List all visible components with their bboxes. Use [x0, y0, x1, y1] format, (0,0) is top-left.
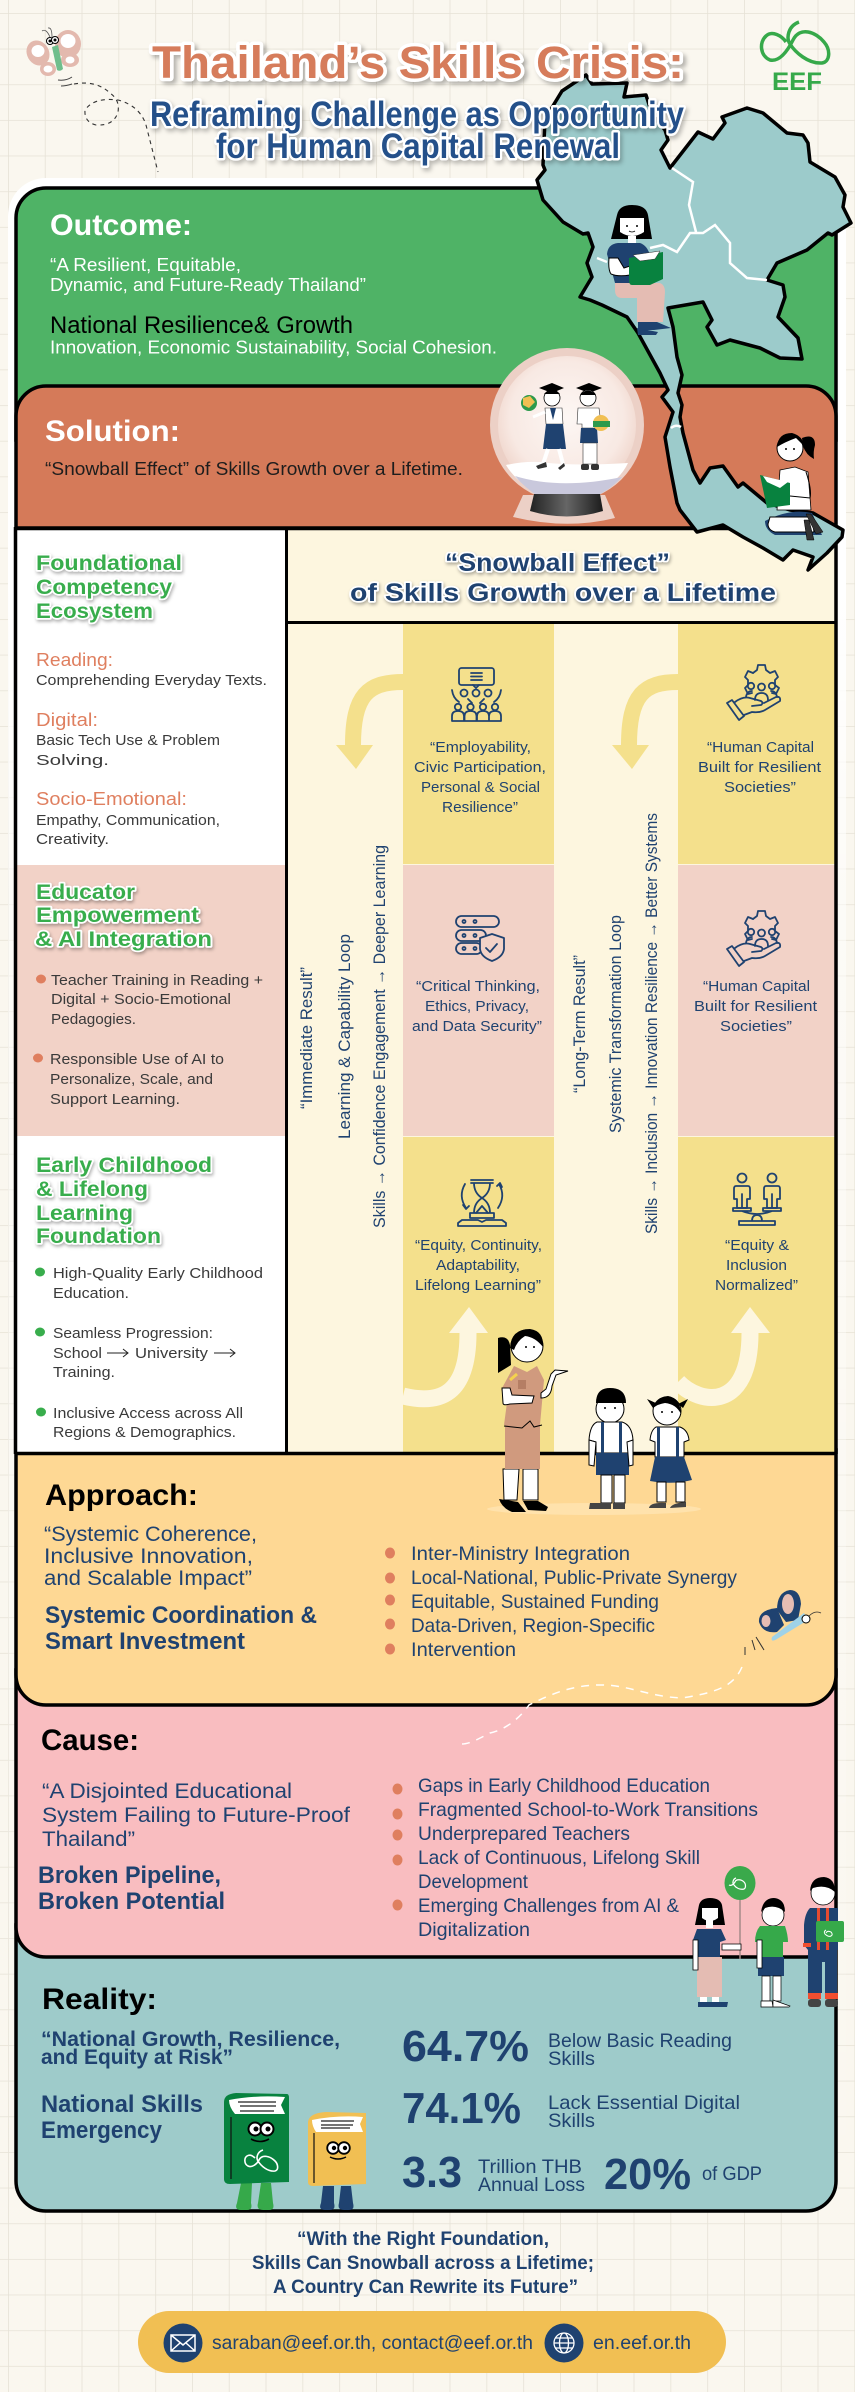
outcome quote — [50, 254, 366, 295]
text: employability — [414, 739, 546, 816]
reality statement: National Skills — [41, 2091, 203, 2118]
stat: gdp — [604, 2150, 762, 2199]
cause bullet list: Gaps in Early Childhood Education — [418, 1775, 710, 1797]
email addresses: saraban@eef.or.th, contact@eef.or.th — [212, 2332, 533, 2354]
text: human capital middle — [694, 978, 818, 1035]
stat: reading — [402, 2022, 732, 2071]
stat: digital: Skills — [548, 2110, 595, 2132]
educator bullets: Teacher Training in Reading + — [51, 972, 263, 989]
educator empowerment heading: Educator — [36, 881, 135, 904]
stat: annual loss: 3.3 — [402, 2148, 462, 2197]
reading text: Comprehending Everyday Texts. — [36, 672, 267, 689]
cause quote: System Failing to Future-Proof — [42, 1803, 350, 1827]
approach bullet list: Intervention — [411, 1639, 516, 1661]
vertical label: long-term result: “Long-Term Result” — [570, 955, 589, 1093]
text: human capital middle: Societies” — [720, 1018, 792, 1035]
early childhood bullets: Education. — [53, 1285, 129, 1302]
socio-emotional text — [36, 789, 220, 848]
panel: outcome — [16, 188, 836, 440]
heading: outcome: Outcome: — [50, 209, 192, 242]
character: teacher — [487, 1329, 701, 1515]
cause quote: “A Disjointed Educational — [42, 1779, 292, 1803]
vertical label: systems path: Skills → Inclusion → Innovation Resilience → Better Systems — [642, 813, 661, 1234]
stat: digital: Lack Essential Digital — [548, 2092, 740, 2114]
cause bullet list: Development — [418, 1871, 529, 1893]
character: girl reading on map — [607, 205, 671, 335]
reality quote — [41, 2028, 340, 2069]
logo: EEF — [761, 22, 829, 96]
icon: yellow book mascot — [308, 2112, 366, 2210]
title line one: Thailand’s Skills Crisis: — [152, 37, 684, 88]
digital text: Solving. — [36, 752, 109, 769]
early childhood bullets: School — [53, 1345, 102, 1362]
cause statement — [38, 1862, 225, 1915]
arrow: up right — [678, 1307, 770, 1397]
cause bullet list: Digitalization — [418, 1919, 530, 1941]
text: human capital top: “Human Capital — [707, 739, 814, 756]
cause bullet list: Fragmented School-to-Work Transitions — [418, 1799, 758, 1821]
outcome quote: Dynamic, and Future-Ready Thailand” — [50, 274, 366, 295]
text: human capital top: Built for Resilient — [698, 759, 822, 776]
digital text — [36, 710, 220, 769]
early childhood bullets: Regions & Demographics. — [53, 1424, 236, 1441]
text: human capital middle: Built for Resilient — [694, 998, 818, 1015]
icon: green book mascot — [224, 2093, 289, 2210]
educator bullets: Personalize, Scale, and — [50, 1071, 213, 1088]
boy graduate — [576, 383, 610, 470]
educator empowerment heading: Empowerment — [36, 904, 199, 927]
approach bullet list: Inter-Ministry Integration — [411, 1543, 630, 1565]
icon: blue butterfly — [745, 1590, 821, 1655]
character: girl student — [647, 1396, 692, 1508]
cause statement: Broken Pipeline, — [38, 1862, 221, 1889]
subtitle — [150, 95, 684, 166]
dashed flight path: white — [462, 1667, 742, 1744]
educator bullets — [33, 972, 263, 1108]
text: employability: Resilience” — [442, 799, 518, 816]
early childhood bullets: University — [135, 1345, 209, 1362]
approach statement — [45, 1602, 317, 1655]
cause quote — [42, 1779, 350, 1851]
text: critical thinking — [412, 978, 542, 1035]
text: equity continuity: Lifelong Learning” — [415, 1277, 541, 1294]
arrow: up left — [403, 1307, 488, 1399]
icon: human capital gear hand top — [727, 665, 780, 720]
educator empowerment heading — [35, 881, 212, 951]
subtitle: for Human Capital Renewal — [216, 127, 620, 166]
girl — [693, 1898, 741, 2007]
early childhood heading — [36, 1154, 212, 1248]
character group: girl with balloon, boy, and man — [693, 1866, 844, 2007]
educator empowerment heading: & AI Integration — [35, 928, 212, 951]
text: equity continuity: Adaptability, — [436, 1257, 520, 1274]
text: critical thinking: and Data Security” — [412, 1018, 542, 1035]
character: girl reading bottom right — [760, 433, 823, 540]
icon: globe — [544, 2324, 584, 2362]
icon: data security shield — [456, 916, 504, 961]
subtitle: Reframing Challenge as Opportunity — [150, 95, 684, 134]
socio-emotional text: Empathy, Communication, — [36, 812, 220, 829]
foundational competency heading: Competency — [36, 576, 172, 599]
balloon — [724, 1866, 756, 1959]
character: boy student — [589, 1388, 633, 1509]
text: critical thinking: “Critical Thinking, — [416, 978, 540, 995]
reality quote: “National Growth, Resilience, — [41, 2028, 340, 2051]
illustration: snow globe — [490, 348, 644, 524]
early childhood heading: & Lifelong — [36, 1178, 148, 1201]
website: en.eef.or.th — [593, 2332, 691, 2354]
ground shadow — [487, 1503, 701, 1515]
socio-emotional text: Socio-Emotional: — [36, 789, 187, 809]
approach bullet list: Equitable, Sustained Funding — [411, 1591, 659, 1613]
title — [150, 37, 684, 166]
text: equity inclusion: Normalized” — [715, 1277, 798, 1294]
stat: annual loss — [402, 2148, 585, 2197]
early childhood heading: Foundation — [36, 1225, 161, 1248]
vertical label: systemic loop: Systemic Transformation Loop — [606, 915, 625, 1133]
stat: annual loss: Annual Loss — [478, 2174, 585, 2196]
text: critical thinking: Ethics, Privacy, — [425, 998, 529, 1015]
text: equity continuity: “Equity, Continuity, — [415, 1237, 542, 1254]
panel: cause — [16, 1670, 836, 1957]
early childhood heading: Learning — [36, 1202, 133, 1225]
early childhood bullets: Seamless Progression: — [53, 1325, 213, 1342]
map of Thailand — [537, 75, 851, 570]
cause bullet list — [392, 1775, 758, 1941]
stat: reading: 64.7% — [402, 2022, 529, 2071]
text: equity continuity — [415, 1237, 542, 1294]
snowball heading — [350, 549, 776, 607]
boy — [755, 1898, 790, 2007]
arrow: down left loop — [336, 682, 403, 769]
educator bullets: Support Learning. — [50, 1091, 180, 1108]
early childhood bullets — [35, 1265, 263, 1441]
heading: reality: Reality: — [42, 1983, 157, 2016]
approach bullet list: Data-Driven, Region-Specific — [411, 1615, 655, 1637]
text: equity inclusion: “Equity & — [725, 1237, 789, 1254]
logo: EEF: EEF — [772, 68, 822, 96]
early childhood bullets: Inclusive Access across All — [53, 1405, 243, 1422]
panel: left column — [16, 528, 287, 1454]
approach quote: Inclusive Innovation, — [44, 1544, 253, 1568]
stat: annual loss: Trillion THB — [478, 2156, 582, 2178]
cause bullet list: Underprepared Teachers — [418, 1823, 630, 1845]
solution text: “Snowball Effect” of Skills Growth over a Lifetime. — [45, 458, 463, 479]
early childhood heading: Early Childhood — [36, 1154, 212, 1177]
icon: balance with two people — [733, 1174, 781, 1225]
closing quote: “With the Right Foundation, — [297, 2228, 549, 2250]
arrow: down right loop — [612, 682, 678, 769]
text: human capital top — [698, 739, 822, 796]
text: equity inclusion — [715, 1237, 798, 1294]
girl graduate — [521, 383, 566, 470]
digital text: Digital: — [36, 710, 98, 730]
stat: gdp: of GDP — [702, 2163, 762, 2185]
icon: audience — [452, 668, 501, 721]
approach bullet list: Local-National, Public-Private Synergy — [411, 1567, 737, 1589]
snowball heading: of Skills Growth over a Lifetime — [350, 579, 776, 607]
panel: approach — [16, 1450, 836, 1705]
stat: reading: Below Basic Reading — [548, 2030, 732, 2052]
educator bullets: Pedagogies. — [51, 1011, 136, 1028]
text: equity inclusion: Inclusion — [726, 1257, 787, 1274]
approach statement: Systemic Coordination & — [45, 1602, 317, 1629]
closing quote: A Country Can Rewrite its Future” — [273, 2276, 578, 2298]
text: human capital middle: “Human Capital — [703, 978, 810, 995]
reality statement — [41, 2091, 203, 2144]
reading text — [36, 650, 267, 689]
man — [803, 1877, 844, 2007]
icon: motion ticks — [58, 77, 72, 86]
vertical label: immediate result: “Immediate Result” — [297, 967, 316, 1109]
reading text: Reading: — [36, 650, 113, 670]
text: employability: “Employability, — [430, 739, 531, 756]
text: employability: Civic Participation, — [414, 759, 546, 776]
outcome quote: “A Resilient, Equitable, — [50, 254, 241, 275]
panel: solution — [16, 386, 836, 528]
panel: snowball matrix — [286, 527, 836, 1454]
stat: reading: Skills — [548, 2048, 595, 2070]
text: employability: Personal & Social — [421, 779, 540, 796]
outcome details: Innovation, Economic Sustainability, Social Cohesion. — [50, 336, 497, 358]
socio-emotional text: Creativity. — [36, 831, 109, 848]
cause statement: Broken Potential — [38, 1888, 225, 1915]
reality quote: and Equity at Risk” — [41, 2046, 233, 2069]
stat: gdp: 20% — [604, 2150, 691, 2199]
stat: digital: 74.1% — [402, 2084, 521, 2133]
vertical label: skills path: Skills → Confidence Engagement → Deeper Learning — [370, 845, 389, 1228]
early childhood bullets: High-Quality Early Childhood — [53, 1265, 263, 1282]
outcome statement: National Resilience& Growth — [50, 312, 353, 339]
foundational competency heading: Ecosystem — [36, 600, 153, 623]
text: human capital top: Societies” — [724, 779, 796, 796]
early childhood bullets: Training. — [53, 1364, 115, 1381]
foundational competency heading — [36, 552, 182, 623]
vertical label: learning loop: Learning & Capability Loop — [335, 934, 354, 1139]
cause bullet list: Emerging Challenges from AI & — [418, 1895, 679, 1917]
panel: reality — [16, 1925, 836, 2211]
snowball heading: “Snowball Effect” — [445, 549, 670, 577]
icon: hourglass and book — [458, 1180, 506, 1226]
cause bullet list: Lack of Continuous, Lifelong Skill — [418, 1847, 700, 1869]
approach quote — [44, 1522, 257, 1590]
cause quote: Thailand” — [42, 1827, 135, 1851]
educator bullets: Digital + Socio-Emotional — [51, 991, 231, 1008]
heading: solution: Solution: — [45, 415, 180, 448]
reality statement: Emergency — [41, 2117, 163, 2144]
icon: pink butterfly — [22, 28, 81, 76]
stat: digital — [402, 2084, 740, 2133]
approach quote: “Systemic Coherence, — [44, 1522, 257, 1546]
icon: mail — [164, 2324, 202, 2362]
heading: cause: Cause: — [41, 1724, 139, 1757]
digital text: Basic Tech Use & Problem — [36, 732, 220, 749]
educator bullets: Responsible Use of AI to — [50, 1051, 224, 1068]
approach quote: and Scalable Impact” — [44, 1566, 252, 1590]
icon: human capital gear hand middle — [727, 911, 780, 966]
approach bullet list — [385, 1543, 737, 1661]
approach statement: Smart Investment — [45, 1628, 245, 1655]
dashed flight path: black — [74, 83, 158, 172]
closing quote: Skills Can Snowball across a Lifetime; — [252, 2252, 594, 2274]
closing quote — [252, 2228, 594, 2298]
contact pill — [138, 2311, 726, 2373]
foundational competency heading: Foundational — [36, 552, 182, 575]
heading: approach: Approach: — [45, 1479, 198, 1512]
